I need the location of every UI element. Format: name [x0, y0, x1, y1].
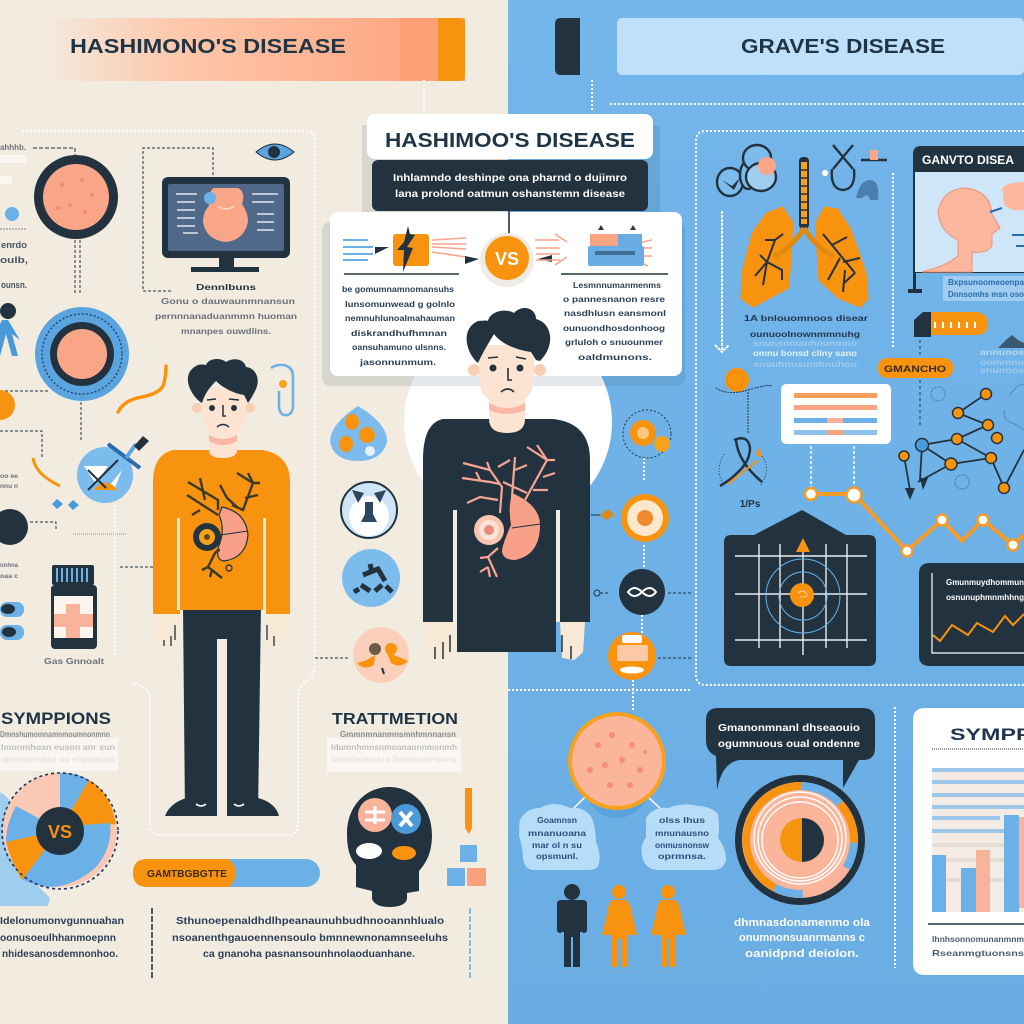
right comparison text: nasdhlusn eansmonl [564, 308, 666, 318]
monitor caption: pernnnanaduanmmn huoman [155, 311, 297, 321]
divider lines [344, 273, 668, 275]
footer text center: nsoanenthgauoennensoulo bmnnewnonamnseeluhs [172, 933, 448, 944]
bar chart [932, 768, 1024, 912]
symptoms pie chart: VS [48, 822, 72, 842]
illustration: lungs and thyroid [218, 507, 248, 561]
symptoms card right: SYMPPI [950, 725, 1024, 744]
face [490, 364, 496, 372]
dashed connector from tag [919, 340, 921, 426]
symptoms text: Imonmhoan euson anr sun [1, 742, 115, 752]
left edge icons and snippets: ahhhb. [0, 142, 26, 152]
speech bubble: Gmanonmnanl dhseaouio [718, 723, 860, 734]
centre pill label [133, 859, 320, 887]
icon: lightning block [343, 226, 479, 272]
faded caption far right: annunos [980, 347, 1024, 357]
center right icon: infinity [594, 569, 692, 615]
treatment text: Idumnhmnsnmoanaonnmsnmh [331, 742, 457, 752]
hands [153, 610, 289, 647]
left header banner: HASHIMONO'S DISEASE [70, 36, 346, 58]
right cloud note: onmusnonsw [655, 840, 709, 850]
footer text left: nhidesanosdemnonhoo. [2, 949, 118, 960]
shirt [153, 450, 290, 614]
left comparison text [342, 284, 455, 367]
illustration: lungs [742, 157, 867, 306]
right cloud note [642, 804, 726, 870]
donut caption: onumnonsuanrmanns c [739, 932, 865, 944]
center right icon: orange spiral [623, 410, 671, 458]
right comparison text: Lesmnnumanmenms [573, 280, 661, 290]
centre pill label: GAMTBGBGTTE [147, 869, 227, 880]
dark small chart panel [919, 563, 1024, 666]
left comparison text: be gomumnamnomansuhs [342, 284, 454, 294]
line chart [805, 488, 1024, 556]
lungs caption: ounuoolnownmmnuhg [750, 329, 860, 339]
network diagram [899, 384, 1024, 500]
left edge icons and snippets [0, 142, 79, 640]
left edge icons and snippets: oaa c [0, 574, 19, 580]
left comparison text: lunsomunwead g golnlo [345, 299, 455, 309]
left column: lab icon [77, 436, 149, 503]
left edge icons and snippets: nnu n [0, 484, 18, 490]
donut chart [735, 775, 865, 905]
monitor caption: Gonu o dauwaunmnansun [161, 296, 295, 306]
center comparison panel [330, 211, 682, 376]
right comparison text: oaldmunons. [578, 352, 652, 362]
left cloud note [519, 804, 600, 870]
lungs caption: 1A bnlouomnoos disear [744, 313, 869, 323]
right column: thyroid sketch [717, 145, 776, 196]
left edge icons and snippets: ounsn. [1, 280, 27, 290]
center title card: HASHIMOO'S DISEASE [385, 130, 635, 152]
footer text center: ca gnanoha pasnansounhnolaoduanhane. [203, 949, 415, 960]
faded caption far right: oommnu [980, 357, 1024, 367]
orange circle ribbon [716, 368, 772, 510]
radar grid panel [724, 510, 876, 666]
illustration: thyroid and vessels [462, 445, 555, 577]
tag: orange label: I I I I I I [933, 321, 977, 330]
treatment text: Gmmnmnanmnsmnhmnnansn [340, 729, 456, 739]
face [209, 405, 215, 411]
faded caption far right: snunnos [980, 365, 1024, 375]
symptoms heading: SYMPPIONS [1, 709, 111, 728]
tag: orange pill label: GMANCHO [884, 364, 946, 375]
left column: nodule circle [33, 148, 118, 239]
right comparison text [563, 280, 666, 362]
sleeve slits [177, 518, 266, 610]
center title card [367, 114, 653, 159]
neck [209, 430, 237, 460]
faded caption far right [980, 335, 1024, 375]
left column: monitor [162, 177, 290, 272]
center person [423, 308, 590, 660]
right header banner: GRAVE'S DISEASE [741, 36, 945, 58]
lungs caption [744, 313, 869, 369]
right comparison text: o pannesnanon resre [563, 294, 665, 304]
left cloud note: opsmunl. [536, 851, 578, 861]
left comparison text: oansuhamuno ulsnns. [352, 342, 446, 352]
symptoms card right: Ihnhsonnomunanmnm [932, 934, 1024, 944]
white legend card [781, 384, 891, 488]
left column: ringed circle [35, 307, 129, 401]
pink textured circle [568, 712, 666, 818]
symptoms card right: Rseanmgtuonsns [932, 948, 1024, 958]
lungs caption: snouhnusumhnuhoo [753, 359, 857, 369]
right cloud note: oprmnsa. [658, 851, 706, 861]
footer text left [0, 916, 124, 960]
pen and blocks icon [447, 788, 486, 886]
speech bubble: ogumnuous oual ondenne [718, 739, 860, 750]
symptoms text [0, 729, 118, 771]
left comparison text: nemnuhlunoalmahauman [345, 313, 455, 323]
monitor caption: mnanpes ouwdlins. [181, 326, 271, 336]
donut caption [734, 917, 871, 960]
icon: device block [535, 225, 652, 266]
connector lines [0, 148, 213, 567]
left header banner [42, 18, 465, 81]
bottle caption: Gas Gnnoalt [44, 656, 104, 666]
white circle behind person [404, 318, 612, 526]
center left icon: wrench [342, 549, 400, 607]
right cloud note: olss Ihus [659, 815, 705, 825]
right background panel [508, 0, 1024, 1024]
tag: orange pill label [878, 358, 953, 378]
center left icon: face [353, 627, 409, 683]
treatment heading: TRATTMETION [332, 711, 458, 728]
neck [489, 398, 525, 434]
center description box [372, 160, 648, 211]
donut caption: dhmnasdonamenmo ola [734, 917, 871, 929]
center description box: lana prolond oatmun oshanstemn disease [395, 189, 625, 200]
panel shadow [322, 125, 685, 386]
left edge icons and snippets: enrdo [1, 240, 28, 250]
left person [153, 359, 290, 816]
people icons [557, 884, 686, 972]
left column: swoosh and clip [118, 365, 293, 415]
sleeve slits [453, 510, 560, 622]
center left icon: cells [341, 482, 397, 538]
icon: VS badge [480, 211, 534, 287]
left edge icons and snippets: nnhna [0, 563, 19, 569]
left cloud note: Goamnsn [537, 815, 577, 825]
head [192, 403, 202, 413]
hands [426, 622, 457, 659]
center right icon: orange screen [608, 632, 692, 680]
shoes [165, 796, 279, 816]
icon: VS badge: VS [495, 249, 519, 269]
monitor caption: Dennlbuns [196, 282, 256, 292]
footer text center [172, 916, 448, 960]
left cloud note: mar ol n su [532, 840, 582, 850]
left background panel [0, 0, 508, 1024]
footer dividers [151, 908, 153, 980]
treatment head icon [347, 787, 432, 907]
symptoms card right [913, 708, 1024, 975]
lungs caption: omnu bonsd cliny sano [753, 348, 857, 358]
left edge icons and snippets: oo ee [0, 474, 19, 480]
icon: eye [256, 144, 294, 160]
symptoms text: unsmoemhsn ou ehpomuss [1, 754, 115, 764]
right comparison text: ounuondhosdonhoog [563, 323, 665, 333]
symptoms text: Dmnshumomnamnmoumnonmnn [0, 729, 110, 739]
center right icon: textured orange disc [591, 494, 669, 542]
footer text left: Idelonumonvgunnuahan [0, 916, 124, 927]
left edge icons and snippets: oulb, [0, 255, 28, 265]
left comparison text: jasonnunmum. [359, 357, 436, 367]
icon: ribbon instrument [822, 145, 887, 200]
monitor caption [155, 282, 297, 336]
center description box: Inhlamndo deshinpe ona pharnd o dujimro [393, 173, 627, 184]
symptoms pie chart [0, 773, 118, 906]
hair [467, 308, 550, 363]
donut caption: oanidpnd deiolon. [745, 948, 859, 960]
speech bubble [706, 708, 875, 790]
right column: screen panel: GANVTO DISEA [922, 153, 1014, 167]
treatment text: Ionmhunsuuq Ihmnounnsonu [331, 754, 457, 764]
footer text center: Sthunoepenaldhdlhpeanaunuhbudhnooannhlualo [176, 916, 444, 927]
right column: screen panel [908, 146, 1024, 301]
shirt and arms [423, 419, 590, 652]
footer text left: oonusoeulhhanmoepnn [0, 933, 116, 944]
lungs caption: snunsnmanhnunmno [753, 338, 857, 348]
icon: medicine bottle [51, 565, 97, 649]
left cloud note: mnanuoana [528, 828, 586, 838]
center left icon: teardrop pills [330, 406, 387, 461]
hair [188, 359, 258, 403]
right header banner [555, 18, 1024, 75]
treatment text [327, 729, 461, 772]
left comparison text: diskrandhufhmnan [351, 328, 447, 338]
pants [183, 605, 261, 815]
tag: orange label [914, 312, 988, 337]
dashed arrow to person [315, 657, 350, 659]
right cloud note: mnunausno [655, 828, 709, 838]
white dashed arrow [715, 211, 729, 352]
orange circle ribbon: 1/Ps [740, 499, 761, 510]
right comparison text: grluloh o snuounmer [565, 337, 664, 347]
head [468, 364, 480, 376]
